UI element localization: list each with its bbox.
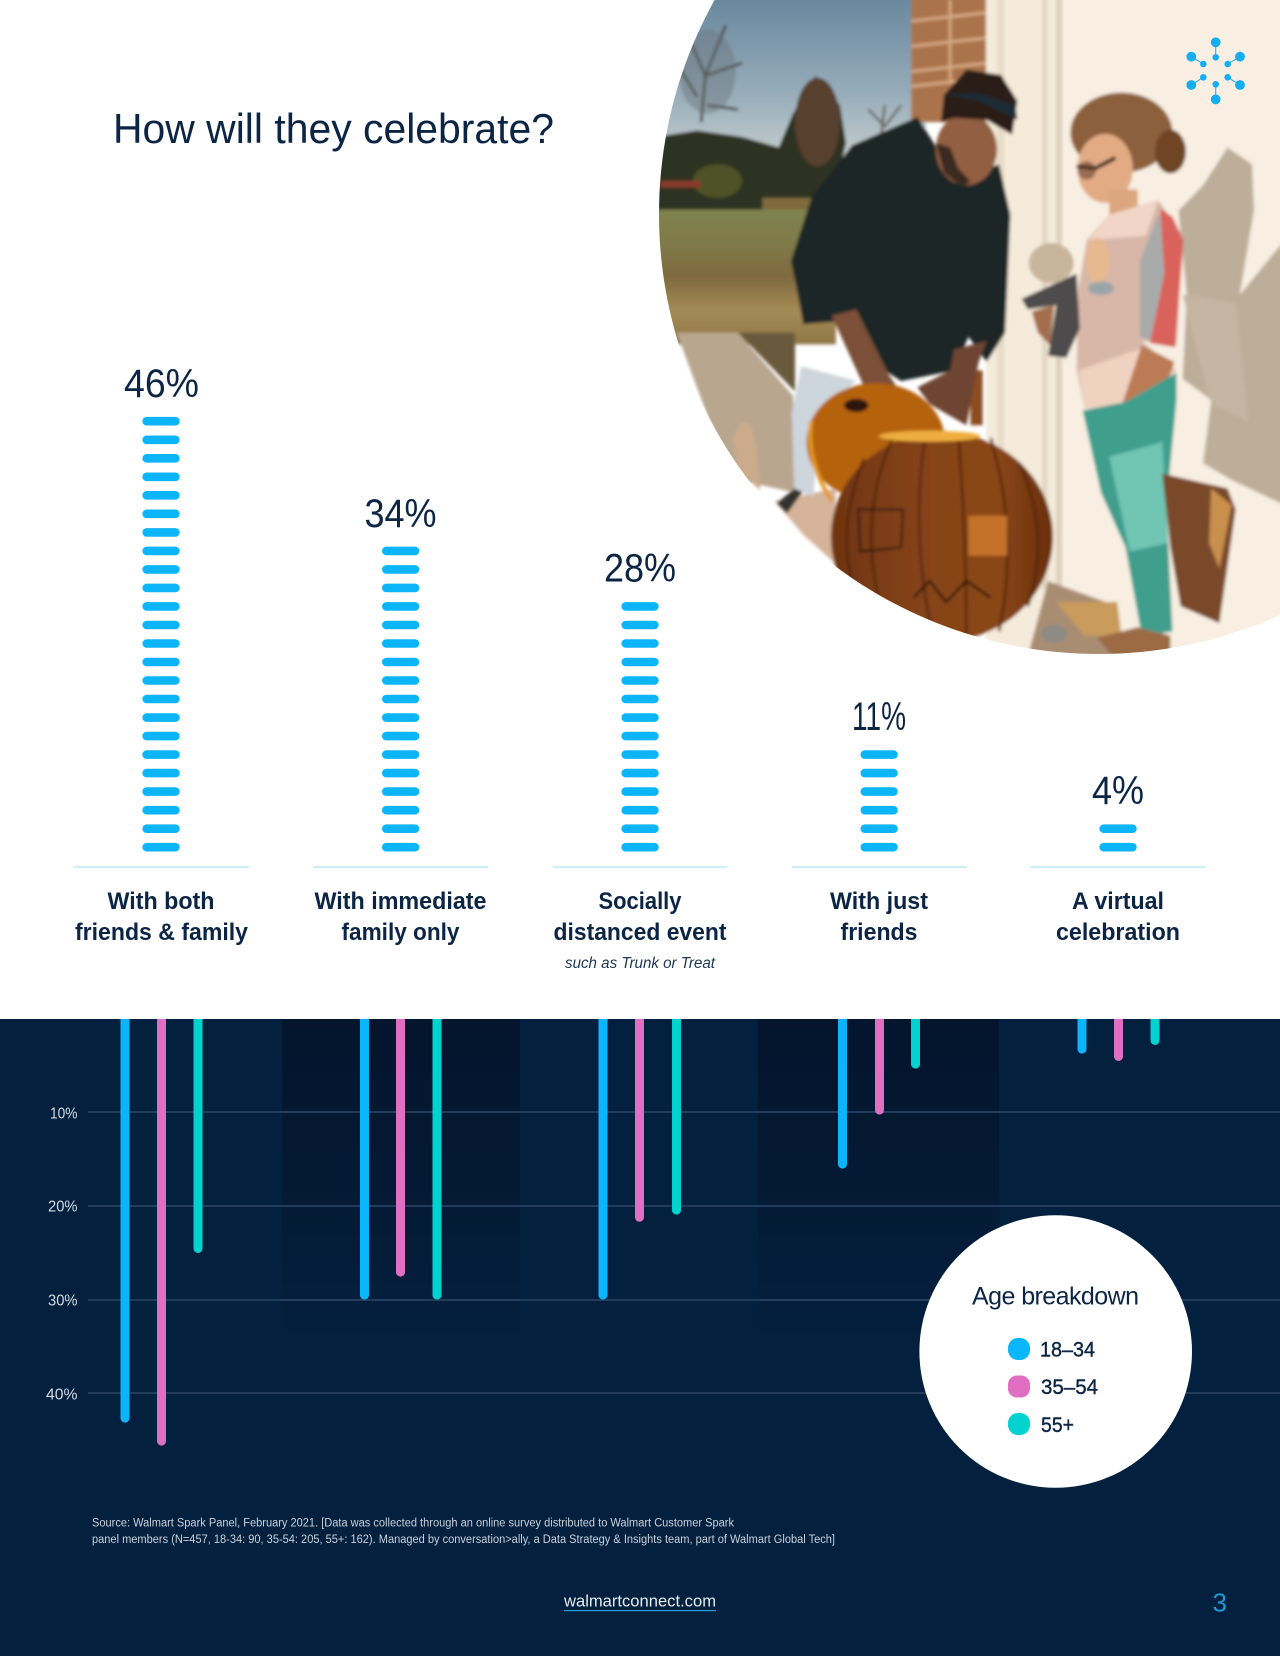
photo: father and daughter carving pumpkins — [632, 0, 1280, 665]
axis labels: 40% — [46, 1386, 78, 1404]
label: socially distanced event: distanced event — [554, 919, 726, 946]
axis labels — [46, 1106, 78, 1404]
column: with just friends, 11% — [792, 695, 967, 946]
legend item 35–54 — [1008, 1376, 1098, 1399]
logo icon: spark — [1187, 38, 1244, 104]
axis labels: 10% — [50, 1106, 78, 1122]
label: with just friends: With just — [830, 888, 928, 915]
axis labels: 30% — [48, 1292, 78, 1310]
legend item 35–54: 35–54 — [1041, 1376, 1098, 1399]
stripe bar 34% — [382, 547, 419, 852]
value 11%: 11% — [852, 695, 906, 739]
bars: with immediate family only — [360, 1000, 442, 1300]
label: with both friends and family: friends & family — [75, 919, 249, 946]
label: with just friends: friends — [840, 919, 918, 946]
title: How will they celebrate? — [113, 105, 554, 152]
label: with immediate family only: With immediate — [314, 888, 486, 915]
panel: age breakdown chart — [0, 1000, 1280, 1656]
legend title: Age breakdown — [972, 1282, 1139, 1310]
source note: panel members (N=457, 18-34: 90, 35-54: 205, 55+: 162). Managed by conversation>ally, a Data Strategy & Insights team, part of Walmart Global Tech] — [92, 1534, 835, 1546]
legend item 55+ — [1008, 1413, 1074, 1437]
sublabel: such as Trunk or Treat: such as Trunk or Treat — [565, 955, 716, 972]
bars: with both friends and family — [120, 1000, 202, 1446]
value 4%: 4% — [1092, 769, 1144, 813]
column: with immediate family only, 34% — [313, 492, 488, 946]
stripe bar 46% — [142, 417, 180, 852]
label: with immediate family only: family only — [342, 919, 460, 946]
label: a virtual celebration: celebration — [1056, 919, 1180, 946]
legend: age breakdown — [919, 1215, 1192, 1488]
value 34%: 34% — [364, 492, 436, 536]
stripe bar 11% — [860, 750, 898, 852]
source note: Source: Walmart Spark Panel, February 2021. [Data was collected through an online survey distributed to Walmart Customer Spark — [92, 1518, 734, 1530]
label: with both friends and family: With both — [108, 888, 214, 915]
label: a virtual celebration: A virtual — [1072, 888, 1164, 915]
footer link: walmartconnect.com — [563, 1592, 716, 1610]
column: socially distanced event, 28% — [552, 546, 728, 972]
legend item 18–34 — [1008, 1338, 1095, 1362]
column: a virtual celebration, 4% — [1030, 769, 1206, 946]
legend item 55+: 55+ — [1041, 1414, 1074, 1437]
axis labels: 20% — [48, 1198, 78, 1216]
label: socially distanced event: Socially — [598, 888, 682, 915]
value 46%: 46% — [124, 362, 199, 406]
legend item 18–34: 18–34 — [1040, 1338, 1095, 1362]
bars: socially distanced event — [598, 1000, 681, 1300]
bars: with just friends — [838, 1019, 920, 1169]
bars: a virtual celebration — [1078, 1019, 1160, 1061]
stripe bar 4% — [1099, 824, 1137, 852]
page number: 3 — [1212, 1588, 1227, 1618]
column: with both friends and family, 46% — [74, 362, 249, 946]
value 28%: 28% — [604, 546, 676, 590]
age bars — [120, 1000, 1160, 1446]
stripe bar 28% — [621, 602, 659, 852]
